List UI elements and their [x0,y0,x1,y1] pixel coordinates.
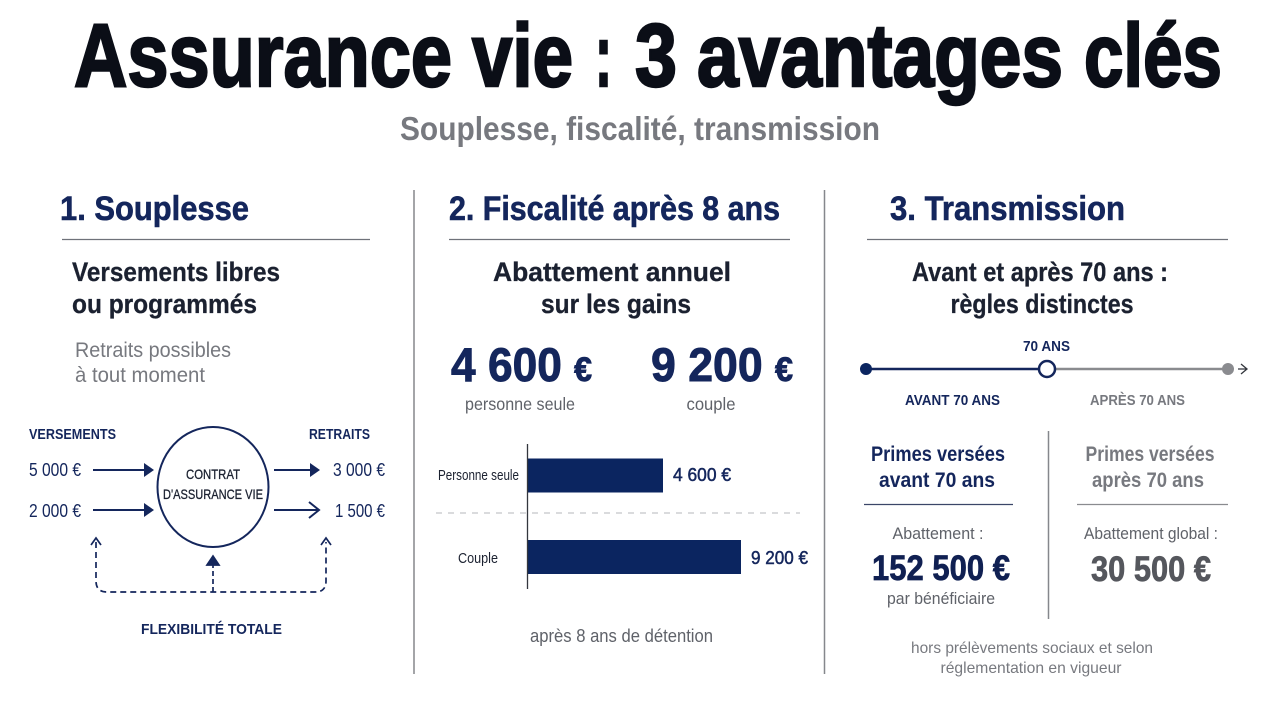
column: après 70 ans: après 70 ans [1092,468,1204,492]
stat: 9 200: couple [686,394,736,414]
panel: souplesse [29,190,385,638]
note: après 8 ans: après 8 ans de détention [530,626,713,646]
footnote: hors prélèvements sociaux et selon [911,640,1153,657]
bar chart [436,444,808,589]
title: : [595,5,612,105]
timeline: APRÈS 70 ANS [1090,392,1185,409]
label: versements: VERSEMENTS [29,427,116,443]
heading: transmission: 3. Transmission [890,190,1125,228]
title: avantages [697,5,1063,105]
arrow: 1 500 out [274,502,319,518]
amount: 5 000: 5 000 € [29,460,81,480]
footnote [911,640,1153,677]
subtitle: Souplesse, fiscalité, transmission [400,110,880,147]
arrow: dashed feedback loop [91,538,331,592]
footnote: réglementation en vigueur [940,660,1122,677]
stat: 9 200: 9 200 € [651,338,793,391]
arrow: 5 000 in [93,463,154,477]
arrow: 2 000 in [93,503,154,517]
panel: transmission [860,190,1247,677]
text: retraits possibles: à tout moment [75,364,205,387]
column: avant 70 ans: Primes versées [871,442,1005,466]
circle: contrat [158,427,268,547]
text: retraits possibles: Retraits possibles [75,339,231,362]
column: avant 70 ans: par bénéficiaire [887,590,995,608]
heading: souplesse: 1. Souplesse [60,190,249,228]
text: versements libres: Versements libres [72,257,280,287]
circle: contrat: CONTRAT [186,466,240,482]
diagram: contrat flows [29,427,385,638]
heading: fiscalité: 2. Fiscalité après 8 ans [449,190,780,228]
text: avant et après 70 ans [912,257,1168,319]
title: vie [472,5,573,105]
amount: 2 000: 2 000 € [29,501,81,521]
amount: 3 000: 3 000 € [333,460,385,480]
text: abattement annuel: sur les gains [541,289,691,319]
column: avant 70 ans: avant 70 ans [879,468,995,492]
text: avant et après 70 ans: Avant et après 70 ans : [912,257,1168,287]
stat: 30 500: 30 500 € [1091,550,1211,589]
stat: 4 600 [451,338,592,414]
stat: 9 200 [651,338,793,414]
stat: 4 600: 4 600 € [451,338,592,391]
panel: fiscalité [436,190,808,646]
text: versements libres: ou programmés [72,289,257,319]
column: après 70 ans: Abattement global : [1084,525,1218,543]
text: abattement annuel [493,257,731,319]
bar: personne seule: 4 600 € [673,465,731,485]
timeline [860,339,1247,409]
stat: 4 600: personne seule [465,394,575,414]
circle: contrat: D'ASSURANCE VIE [163,486,263,502]
title [74,5,1222,105]
amount: 1 500: 1 500 € [335,501,385,521]
text: abattement annuel: Abattement annuel [493,257,731,287]
bar: personne seule [438,458,731,492]
timeline: AVANT 70 ANS [905,393,1000,409]
bar: couple [458,540,808,574]
text: avant et après 70 ans: règles distinctes [950,289,1134,319]
text: retraits possibles [75,339,231,387]
column: avant 70 ans [864,442,1013,608]
label: retraits: RETRAITS [309,427,370,443]
column: après 70 ans: Primes versées [1086,442,1215,466]
column: après 70 ans [1077,442,1228,589]
text: versements libres [72,257,280,319]
arrow: 3 000 out [274,463,320,477]
title: Assurance [74,5,452,105]
bar: couple: 9 200 € [751,548,808,568]
label: flexibilité totale: FLEXIBILITÉ TOTALE [141,621,282,638]
timeline: 70 ANS [1023,339,1070,355]
bar: couple: Couple [458,550,498,567]
title: 3 [635,5,677,105]
title: clés [1084,5,1222,105]
stat: 152 500: 152 500 € [872,549,1010,588]
column: avant 70 ans: Abattement : [892,525,984,543]
bar: personne seule: Personne seule [438,467,519,484]
